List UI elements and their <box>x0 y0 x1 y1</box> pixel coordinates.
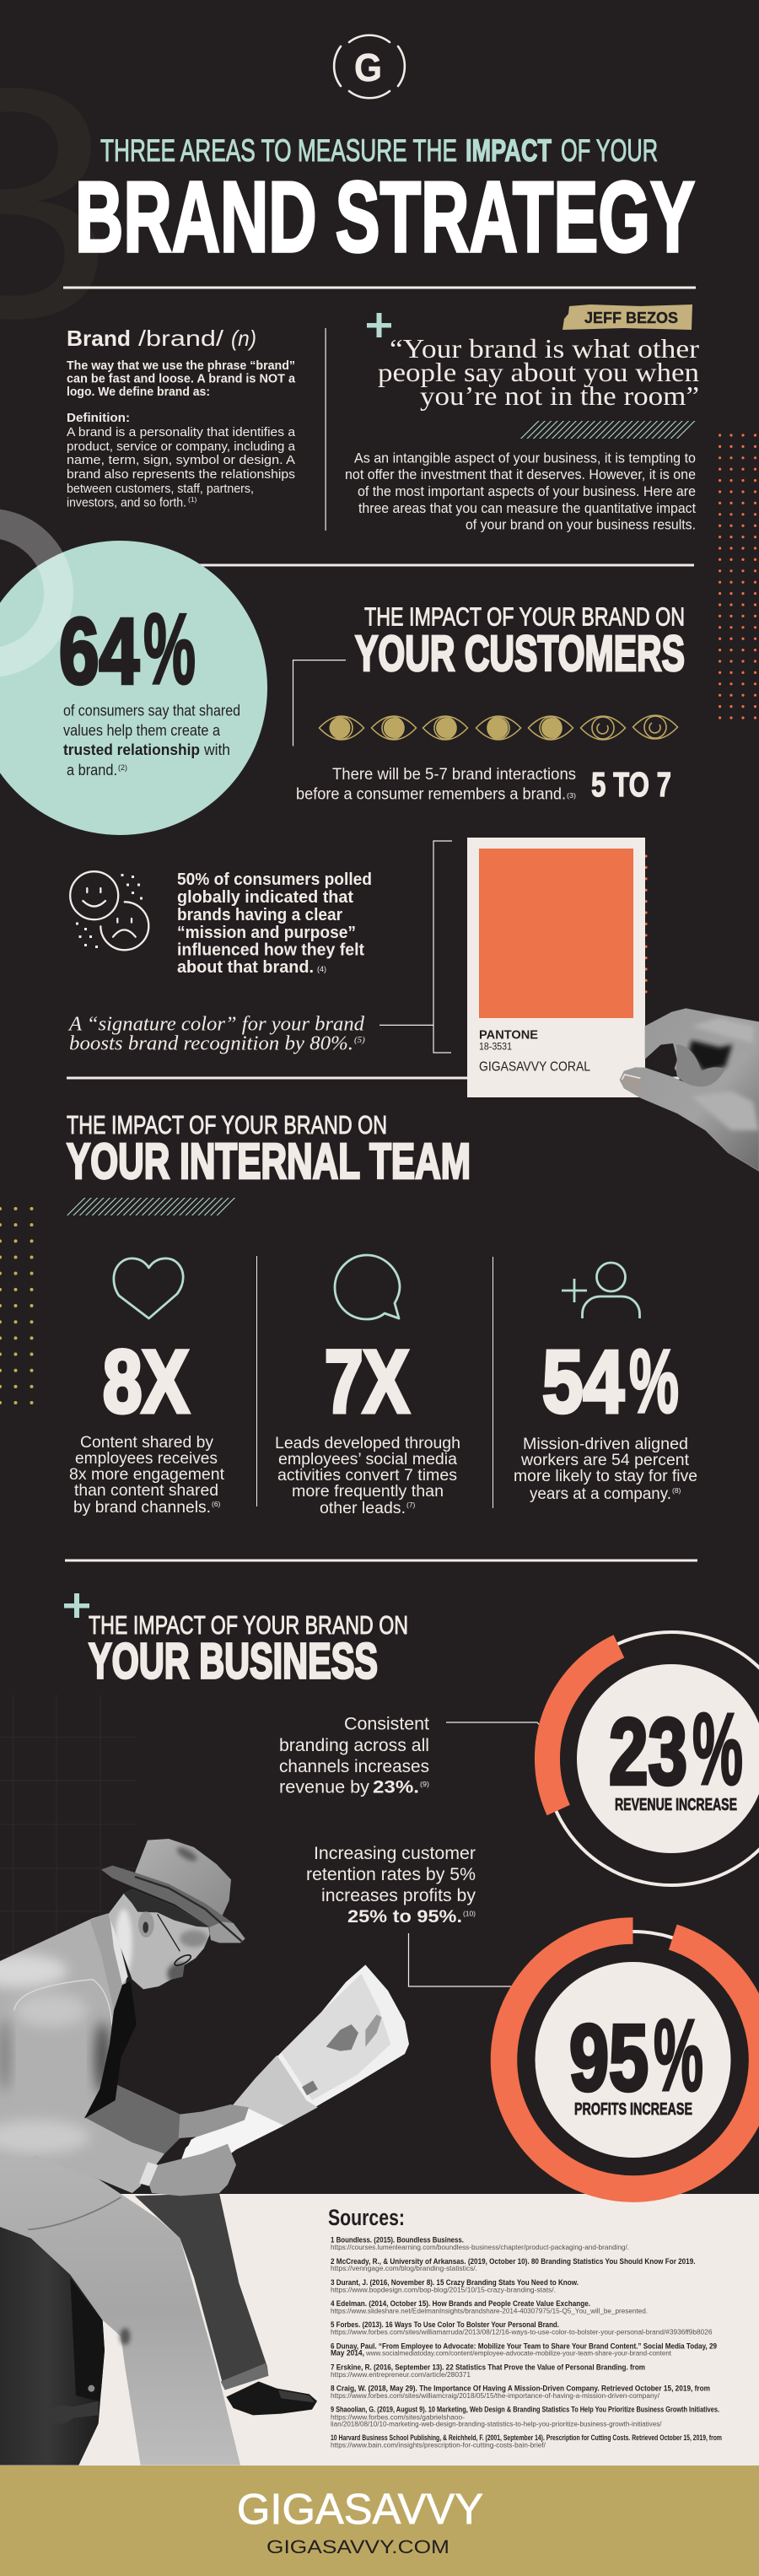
sources panel: 5 Forbes. (2013). 16 Ways To Use Color To Bolster Your Personal Brand. <box>331 2320 559 2329</box>
column: 54%: years at a company. <box>530 1485 671 1503</box>
heading: internal team: YOUR INTERNAL TEAM <box>67 1134 471 1189</box>
stat 64% <box>59 593 196 705</box>
intro paragraph <box>345 451 696 533</box>
revenue text: branding across all <box>279 1736 429 1755</box>
signature color text: A “signature color” for your brand <box>67 1014 365 1036</box>
brand interactions text: (3) <box>567 791 576 800</box>
hatch mark <box>530 421 686 439</box>
icon: heart <box>114 1258 183 1318</box>
title: OF YOUR <box>561 133 658 168</box>
quote: you’re not in the room” <box>420 380 699 411</box>
gold dot grid <box>0 1209 32 1404</box>
heading: business <box>89 1610 408 1689</box>
heading: business: YOUR BUSINESS <box>89 1633 378 1689</box>
image: man reading newspaper <box>0 1839 409 2466</box>
column: 7X: more frequently than <box>292 1483 444 1501</box>
sources panel: Sources: <box>328 2205 405 2230</box>
footer band: GIGASAVVY.COM <box>266 2536 449 2557</box>
signature color text: boosts brand recognition by 80%. <box>69 1032 353 1054</box>
pantone swatch card: PANTONE <box>479 1027 538 1042</box>
column: 7X: activities convert 7 times <box>277 1467 457 1485</box>
stat 64%: % <box>143 593 196 705</box>
column: 7X: Leads developed through <box>275 1435 460 1452</box>
tape label: Jeff Bezos: JEFF BEZOS <box>584 310 678 326</box>
stat description: with <box>203 741 230 758</box>
brand definition text block: can be fast and loose. A brand is NOT a <box>67 373 296 386</box>
sources panel: lian/2018/08/10/10-marketing-web-design-branding-statistics-to-help-you-prioritize-business-growth-initiatives/ <box>331 2420 662 2428</box>
icon: add person <box>562 1263 639 1318</box>
column: 8X: 8X <box>103 1333 189 1431</box>
stat description: of consumers say that shared <box>63 702 240 719</box>
brand definition text block: brand also represents the relationships <box>67 467 295 482</box>
stat 64%: 64 <box>59 600 139 703</box>
heading: customers <box>355 602 685 682</box>
column: 8X: employees receives <box>75 1450 218 1468</box>
brand definition text block: (n) <box>231 326 256 351</box>
heading: internal team: THE IMPACT OF YOUR BRAND ON <box>67 1110 387 1140</box>
sources panel: https://courses.lumenlearning.com/boundless-business/chapter/product-packaging-and-branding/. <box>331 2243 629 2251</box>
icon: happy and sad faces <box>70 871 148 950</box>
jacket <box>0 1913 180 2193</box>
sources panel: May 2014, <box>331 2349 364 2358</box>
pantone swatch card: 18-3531 <box>479 1043 512 1053</box>
sources panel: 1 Boundless. (2015). Boundless Business. <box>331 2236 464 2245</box>
brand definition text block: /brand/ <box>138 326 224 351</box>
sources panel: https://www.bain.com/insights/prescription-for-cutting-costs-bain-brief/ <box>331 2441 546 2449</box>
icon row: seven eyes <box>319 715 678 740</box>
stat description: trusted relationship <box>63 741 200 758</box>
column: 7X <box>275 1255 460 1517</box>
mission and purpose text: globally indicated that <box>177 888 353 907</box>
retention text: 25% to 95%. <box>347 1907 462 1927</box>
logo: G in segmented ring: G <box>354 46 382 89</box>
tie <box>84 1981 137 2119</box>
brand definition text block <box>67 326 296 509</box>
heading: internal team <box>67 1110 471 1189</box>
footer brand: GIGASAVVY <box>237 2485 483 2533</box>
column: 8X: (6) <box>212 1500 221 1508</box>
column: 7X: (7) <box>406 1501 416 1509</box>
retention text: increases profits by <box>321 1886 476 1905</box>
icon: speech bubble <box>335 1255 400 1319</box>
brand definition text block: between customers, staff, partners, <box>67 482 254 496</box>
intro paragraph: As an intangible aspect of your business, it is tempting to <box>354 451 696 466</box>
intro paragraph: of the most important aspects of your business. Here are <box>358 484 696 499</box>
column: 8X <box>69 1258 225 1517</box>
pantone swatch card <box>467 838 645 1097</box>
title: THREE AREAS TO MEASURE THE <box>100 133 457 168</box>
bracket to swatch <box>380 841 452 1053</box>
stat description: a brand. <box>67 762 117 779</box>
revenue text: channels increases <box>279 1757 429 1776</box>
sources panel <box>0 2194 759 2466</box>
icon: plus <box>64 1593 89 1618</box>
column: 54%: more likely to stay for five <box>514 1468 697 1485</box>
sources panel: https://www.slideshare.net/EdelmanInsights/brandshare-2014-40307975/15-Q5_You_will_be_presented. <box>331 2307 648 2315</box>
retention text: retention rates by 5% <box>306 1865 476 1884</box>
revenue text: revenue by <box>279 1778 370 1797</box>
hands <box>139 2104 249 2196</box>
stat description <box>63 702 240 779</box>
brand interactions text: before a consumer remembers a brand. <box>296 785 566 803</box>
quote: “Your brand is what other <box>390 333 699 364</box>
hatch mark <box>76 1198 231 1215</box>
head <box>108 1888 213 1989</box>
heading: business: THE IMPACT OF YOUR BRAND ON <box>89 1610 408 1640</box>
newspaper <box>180 1964 409 2164</box>
sources panel: 3 Durant, J. (2016, November 8). 15 Crazy Branding Stats You Need to Know. <box>331 2278 579 2287</box>
revenue text: Consistent <box>344 1715 429 1734</box>
column: 54%: 54 <box>542 1333 624 1431</box>
sources panel: www.socialmediatoday.com/content/employee-advocate-mobilize-your-team-share-your-brand-content <box>365 2349 672 2358</box>
revenue text <box>279 1715 429 1797</box>
sources panel: https://www.forbes.com/sites/gabrielshaoo- <box>331 2413 465 2422</box>
title: IMPACT <box>466 133 552 168</box>
far trouser leg and shoe <box>135 2193 317 2415</box>
brand interactions text: There will be 5-7 brand interactions <box>332 766 576 784</box>
signature color text: (5) <box>354 1035 365 1045</box>
sources panel: 6 Dunay, Paul. “From Employee to Advocate: Mobilize Your Team to Share Your Brand Content.” Social Media Today, 29 <box>331 2342 717 2351</box>
sources panel: https://www.bopdesign.com/bop-blog/2015/10/15-crazy-branding-stats/. <box>331 2286 556 2294</box>
brand definition text block: (1) <box>188 495 197 504</box>
tape label: Jeff Bezos <box>563 304 692 330</box>
suitcase <box>0 2227 105 2466</box>
column: 54% <box>514 1263 697 1503</box>
sources panel: 7 Erskine, R. (2016, September 13). 22 Statistics That Prove the Value of Personal Branding. from <box>331 2363 645 2372</box>
collar <box>110 1915 128 1985</box>
mission and purpose text: about that brand. <box>177 958 314 977</box>
sources panel: 2 McCready, R., & University of Arkansas. (2019, October 10). 80 Branding Statistics You Should Know For 2019. <box>331 2257 695 2266</box>
sources panel: https://www.forbes.com/sites/williamarruda/2013/08/12/16-ways-to-use-color-to-bolster-your-personal-brand/#3936ff9b8026 <box>331 2328 713 2336</box>
quote <box>378 333 699 411</box>
footer band <box>0 2466 759 2576</box>
column: 54%: workers are 54 percent <box>520 1452 690 1469</box>
retention text: Increasing customer <box>314 1844 476 1863</box>
image: hand holding swatch <box>620 1009 759 1171</box>
revenue text: (9) <box>420 1780 429 1788</box>
mission and purpose text: influenced how they felt <box>177 941 364 960</box>
sources panel: https://venngage.com/blog/branding-statistics/. <box>331 2264 477 2272</box>
hat <box>101 1839 245 1943</box>
signature color text <box>67 1014 365 1054</box>
chart: 95% profits ring: 95 <box>569 2006 649 2110</box>
mission and purpose text: brands having a clear <box>177 906 342 924</box>
intro paragraph: not offer the investment that it deserves. However, it is one <box>345 467 696 482</box>
column: 7X: employees’ social media <box>278 1451 457 1469</box>
column: 54%: % <box>629 1330 679 1431</box>
brand definition text block: Definition: <box>67 412 130 425</box>
mission and purpose text: “mission and purpose” <box>177 924 356 942</box>
retention text: (10) <box>463 1910 476 1918</box>
connector bracket <box>293 660 346 746</box>
logo: G in segmented ring <box>334 35 405 98</box>
brand definition text block: investors, and so forth. <box>67 496 186 509</box>
stat description: (2) <box>118 763 127 772</box>
brand definition text block: Brand <box>67 326 131 351</box>
intro paragraph: three areas that you can measure the quantitative impact <box>358 501 696 516</box>
chart: 23% revenue ring: 23 <box>609 1700 687 1804</box>
chart: 95% profits ring: % <box>654 1997 703 2112</box>
icon: plus <box>367 313 391 337</box>
column: 8X: by brand channels. <box>73 1499 211 1517</box>
column: 7X: 7X <box>325 1333 409 1431</box>
chart: 23% revenue ring <box>545 1632 759 1885</box>
orange dot grid <box>646 435 756 997</box>
sources panel: https://www.forbes.com/sites/williamcraig/2018/05/15/the-importance-of-having-a-mission-driven-company/ <box>331 2391 660 2400</box>
brand definition text block: logo. We define brand as: <box>67 385 210 399</box>
chart: 95% profits ring <box>503 1931 759 2189</box>
brand definition text block: A brand is a personality that identifies a <box>67 425 296 439</box>
brand definition text block: product, service or company, including a <box>67 439 296 454</box>
stat: 5 to 7: 5 TO 7 <box>591 765 671 804</box>
column: 54%: (8) <box>672 1486 681 1495</box>
brand definition text block: The way that we use the phrase “brand” <box>67 359 295 373</box>
retention text <box>306 1844 476 1927</box>
column: 8X: than content shared <box>74 1482 218 1500</box>
mission and purpose text: 50% of consumers polled <box>177 870 372 889</box>
stat description: values help them create a <box>63 722 221 739</box>
chart: 95% profits ring: PROFITS INCREASE <box>574 2099 692 2119</box>
column: 54%: Mission-driven aligned <box>523 1436 688 1453</box>
revenue text: 23%. <box>373 1778 419 1797</box>
connector line <box>446 1722 551 1738</box>
brand definition text block: name, term, sign, symbol or design. A <box>67 453 295 467</box>
sources panel: 8 Craig, W. (2018, May 29). The Importance Of Having A Mission-Driven Company. Retrieved October 15, 2019, from <box>331 2385 710 2393</box>
column: 7X: other leads. <box>320 1500 406 1517</box>
sources panel: https://www.entrepreneur.com/article/280371 <box>331 2370 471 2379</box>
brand interactions text <box>296 766 576 803</box>
connector line <box>408 1933 511 1986</box>
mission and purpose text: (4) <box>317 965 326 973</box>
column: 8X: Content shared by <box>80 1434 214 1452</box>
pantone swatch card: GIGASAVVY CORAL <box>479 1060 590 1075</box>
sources panel: 4 Edelman. (2014, October 15). How Brands and People Create Value Exchange. <box>331 2299 590 2308</box>
mint stat circle <box>0 523 267 835</box>
column: 8X: 8x more engagement <box>69 1466 225 1484</box>
mission and purpose text <box>177 870 372 977</box>
near trouser leg <box>0 2157 240 2466</box>
quote: people say about you when <box>378 357 699 387</box>
intro paragraph: of your brand on your business results. <box>466 518 696 533</box>
